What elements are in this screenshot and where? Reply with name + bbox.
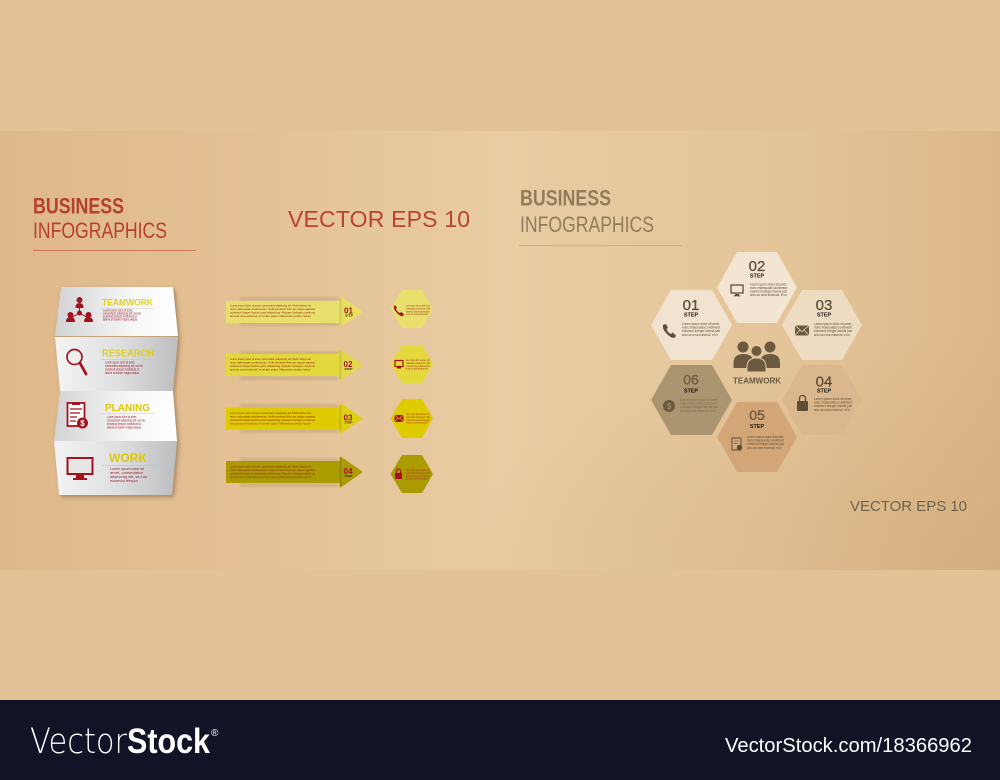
arrow 1: Lorem ipsum dolor sit amet, consectetur adipiscing elit. Morbi dictum est [230,304,311,308]
arrow 4: euismod integer lacinia justo adipiscing. Aliquam tristique maximus [230,472,315,476]
icon: magnifier [67,350,86,374]
small hexagon: phone: malesuada condimentum nulla [406,306,430,310]
hexagon 02: arcu ac urna euismod, et or [750,293,788,297]
hexagon 04: STEP [817,388,832,394]
label: teamwork: TEAMWORK [102,298,153,308]
arrow 3: nunc malesuada condimentum. Nulla hendrerit felis nec augue egestas [230,414,315,418]
small hexagon: lock: Lorem ipsum dolor sit amet, nunc [406,468,430,472]
hexagon 03 [782,290,862,360]
hexagon 01: STEP [684,312,699,318]
hexagon 01: arcu ac urna euismod, et or [682,333,719,337]
arrow 4: 04 [344,467,353,476]
small hexagon: phone: Lorem ipsum dolor sit amet, nunc [406,304,430,308]
panel: planing [54,391,177,441]
right heading: INFOGRAPHICS [520,212,654,237]
arrow 2: euismod integer lacinia justo adipiscing. Aliquam tristique maximus [230,364,315,368]
small hexagon: monitor: Lorem ipsum dolor sit amet, nunc [406,358,430,362]
hexagon 01 [651,290,732,360]
text: work: eiusmod tempor [110,479,139,483]
arrow 1: STEP [345,314,353,318]
hexagon 05: 05 [749,407,765,423]
center: teamwork [733,342,782,386]
hexagon 06: Lorem ipsum dolor sit amet, [680,398,718,402]
label: work: WORK [109,451,147,465]
label: research: RESEARCH [102,348,154,360]
text: planing: Lorem ipsum dolor sit amet, [107,415,137,419]
hexagon 01: Lorem ipsum dolor sit amet, [682,322,720,326]
text: planing: labore et dolore magna aliqua [107,426,141,430]
arrow 3: 03 [344,414,353,422]
arrow 3: Lorem ipsum dolor sit amet, consectetur adipiscing elit. Morbi dictum est [230,411,311,415]
text: teamwork [103,308,141,322]
arrow 3: arcu ac urna euismod, et ornare quam. Maecenas porttitor ipsum [230,422,311,426]
panel: work [54,441,177,495]
hexagon 03: nunc malesuada condiment [814,326,852,330]
middle panel [0,131,1000,570]
arrow 1: nunc malesuada condimentum. Nulla hendrerit felis nec augue egestas [230,307,315,311]
text: teamwork: Lorem ipsum dolor sit amet, [103,308,133,312]
hexagon 04 [782,365,862,435]
text: planing: euismod tempor incididunt ut [107,422,141,426]
icon: monitor [68,458,92,480]
icon: people [734,342,780,372]
small hexagon: monitor: euismod integer lacinia justo [406,364,430,368]
hexagon 06: 06 [683,372,699,388]
icon: clipboard: $ [80,419,85,428]
hexagon 06 [651,365,732,435]
text: planing: consectetur adipiscing elit, sed do [107,418,145,422]
arrow 2: arcu ac urna euismod, et ornare quam. Maecenas porttitor ipsum [230,368,311,372]
hexagon 06: arcu ac urna euismod, et or [680,409,717,413]
small hexagon: envelope: arcu ac urna euismod et [406,420,428,424]
small hexagon: envelope: euismod integer lacinia justo [406,418,430,422]
arrow 3: euismod integer lacinia justo adipiscing. Aliquam tristique maximus [230,418,315,422]
arrow 3: STEP [344,420,352,424]
fold shadow [54,287,178,495]
hexagon 04: 04 [816,374,832,390]
footer bar [0,700,1000,780]
hexagon 02: euismod integer lacinia just [750,290,787,294]
hexagon 03: 03 [816,297,832,314]
arrow 4 [226,456,363,488]
text: teamwork: euismod tempor incididunt ut [103,314,137,318]
footer url: VectorStock.com/18366962 [725,735,972,757]
center heading: vector eps 10: VECTOR EPS 10 [288,206,470,232]
hexagon 01: 01 [683,297,699,314]
arrow 1: euismod integer lacinia justo adipiscing. Aliquam tristique maximus [230,310,315,314]
text: work: adipiscing elit, sed do [110,475,147,479]
arrow 2: nunc malesuada condimentum. Nulla hendrerit felis nec augue egestas [230,360,315,364]
hexagon 04: arcu ac urna euismod, et or [814,408,851,412]
right heading [519,186,682,246]
hexagon 05: nunc malesuada condiment [747,438,784,442]
hexagon 02: Lorem ipsum dolor sit amet, [750,282,787,286]
small hexagon: lock: euismod integer lacinia justo [406,474,430,478]
hexagon 05: STEP [750,424,765,430]
arrow 4: arcu ac urna euismod, et ornare quam. Maecenas porttitor ipsum [230,475,311,479]
text: teamwork: labore et dolore magna aliqua [103,318,137,322]
hexagon 04: euismod integer lacinia just [814,404,852,408]
logo: VectorStock [30,722,210,762]
hexagon 03: arcu ac urna euismod, et or [814,333,851,337]
text: research: consectetur adipiscing elit, sed do [105,364,143,368]
text: work: Lorem ipsum dolor sit [110,467,144,471]
arrow 2: STEP [344,367,352,371]
label: planing: PLANING [105,402,150,414]
small hexagon: monitor: arcu ac urna euismod et [406,366,428,370]
small hexagon: envelope: malesuada condimentum nulla [406,415,430,419]
arrow 1 [226,296,363,327]
hexagon 05 [717,402,797,472]
text: research: euismod tempor incididunt ut [105,368,139,372]
hexagon 01: nunc malesuada condiment [682,326,720,330]
left heading: INFOGRAPHICS [33,218,167,243]
arrow 2: Lorem ipsum dolor sit amet, consectetur adipiscing elit. Morbi dictum est [230,357,311,361]
small hexagon: phone [390,290,433,328]
top band [0,0,1000,131]
left heading [33,194,196,251]
panel: research [55,337,178,391]
text: teamwork: consectetur adipiscing elit, sed do [103,312,141,316]
text: research [105,360,143,375]
hexagon 02 [717,252,797,323]
small hexagon: envelope [390,399,433,438]
hexagon 02: STEP [750,274,765,280]
hexagon 06: nunc malesuada condiment [680,402,718,406]
small hexagon: envelope: Lorem ipsum dolor sit amet, nunc [406,412,430,416]
hexagon 01: euismod integer lacinia just [682,329,720,333]
small hexagon: monitor: malesuada condimentum nulla [406,361,430,365]
hexagon 02: nunc malesuada condiment [750,286,787,290]
panel: teamwork [55,287,178,336]
hexagon 05: euismod integer lacinia just [747,442,784,446]
small hexagon: lock: malesuada condimentum nulla [406,471,430,475]
hexagon 03: Lorem ipsum dolor sit amet, [814,322,852,326]
hexagon 04: Lorem ipsum dolor sit amet, [814,397,852,401]
left heading: BUSINESS [33,194,124,218]
hexagon 05: Lorem ipsum dolor sit amet, [747,435,784,439]
small hexagon: lock [390,455,433,493]
arrow 4: STEP [344,474,352,478]
hexagon 03: STEP [817,312,832,318]
text: work: amet, consectetur [110,471,144,475]
hexagon 06: STEP [684,388,699,394]
right caption: vector eps 10: VECTOR EPS 10 [850,498,967,515]
icon: teamwork [66,297,93,322]
hexagon 06: $ [667,402,672,411]
text: work [110,467,147,483]
small hexagon: monitor [390,345,433,383]
center: teamwork: TEAMWORK [733,376,782,386]
arrow 2: 02 [344,360,353,369]
text: research: labore et dolore magna aliqua [105,371,139,375]
arrow 1: arcu ac urna euismod, et ornare quam. Maecenas porttitor ipsum [230,314,311,318]
arrow 2 [226,349,363,381]
text: research: Lorem ipsum dolor sit amet, [105,360,135,364]
small hexagon: lock: arcu ac urna euismod et [406,476,428,480]
hexagon 06: euismod integer lacinia just [680,405,718,409]
hexagon 04: nunc malesuada condiment [814,400,852,404]
hexagon 02: 02 [749,258,765,275]
text: planing [107,415,145,430]
arrow 4: nunc malesuada condimentum. Nulla hendrerit felis nec augue egestas [230,468,315,472]
hexagon 05: arcu ac urna euismod, et or [747,446,783,450]
folded paper list [54,287,178,495]
bottom band [0,570,1000,700]
footer bar: ® [211,728,219,739]
small hexagon: phone: euismod integer lacinia justo [406,310,430,314]
arrow 3 [226,403,363,434]
arrow 1: 01 [344,306,353,316]
right heading: BUSINESS [520,186,611,210]
hexagon 03: euismod integer lacinia just [814,329,852,333]
small hexagon: phone: arcu ac urna euismod et [406,312,428,316]
arrow 4: Lorem ipsum dolor sit amet, consectetur adipiscing elit. Morbi dictum est [230,464,311,468]
